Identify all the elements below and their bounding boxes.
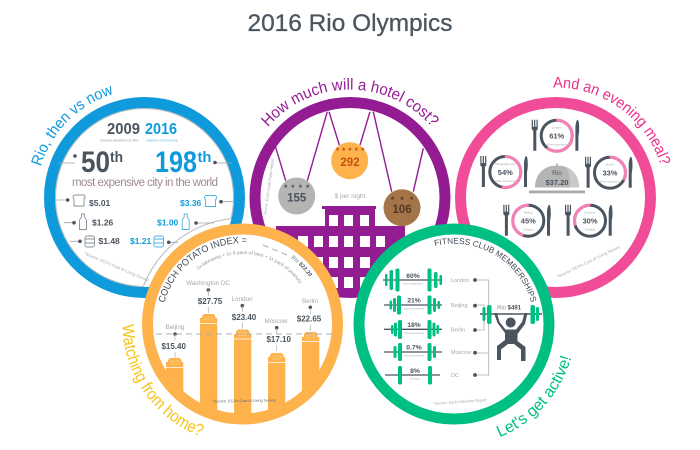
icons: grey bread, milk, beer bbox=[73, 195, 94, 247]
right prices: $3.36 bbox=[180, 198, 202, 208]
formula: 2x takeaway + 1x 6 pack of beer + 1x pack of peanuts bbox=[196, 250, 302, 284]
Washington DC: $27.75 bbox=[198, 297, 223, 306]
plate: Beijing 45% bbox=[503, 205, 551, 236]
Moscow: Moscow bbox=[264, 318, 288, 325]
plate: Washington DC 54% bbox=[480, 156, 528, 188]
barbell: Beijing 21%: 21% bbox=[407, 298, 421, 304]
lifter barbell bbox=[480, 305, 542, 324]
barbell: DC 8% bbox=[385, 366, 440, 384]
panel: hotel cost bbox=[250, 78, 450, 298]
right prices: $1.21 bbox=[130, 236, 152, 246]
icon: weightlifter bbox=[494, 313, 528, 361]
barbell: Beijing 21%: More expensive bbox=[404, 306, 424, 310]
barbell: Berlin 18%: 18% bbox=[407, 322, 421, 329]
source note: *Source: ECA's Cost of Living Survey bbox=[212, 398, 276, 404]
Washington DC bbox=[186, 280, 230, 313]
Moscow bbox=[264, 318, 291, 351]
years bbox=[107, 121, 177, 138]
plate: Berlin 33%: 33% bbox=[602, 169, 618, 178]
years: 2016 bbox=[145, 121, 177, 138]
Moscow: $17.10 bbox=[266, 335, 291, 344]
Beijing: Beijing bbox=[166, 324, 185, 331]
barbell: London 60%: 60% bbox=[406, 273, 420, 280]
white disc bbox=[142, 224, 342, 424]
ring: pink bbox=[460, 102, 650, 292]
plate: Beijing 45%: Cheaper bbox=[523, 228, 534, 232]
rank 2016: th bbox=[198, 149, 212, 166]
index dash line bbox=[156, 245, 332, 334]
rank 2009: th bbox=[110, 149, 123, 166]
plate: Berlin 33% bbox=[585, 157, 632, 188]
heading: fitness club memberships: FITNESS CLUB MEMBERSHIPS bbox=[434, 238, 536, 302]
heading: Rio, then vs now: Rio, then vs now bbox=[31, 86, 112, 166]
Washington DC: Washington DC bbox=[186, 280, 230, 287]
barbell: Berlin 18% bbox=[384, 320, 442, 339]
heading: evening meal: And an evening meal? bbox=[553, 76, 670, 163]
Berlin: $22.65 bbox=[297, 315, 322, 324]
rank caption: most expensive city in the world bbox=[72, 177, 218, 189]
rank 2009: 50 bbox=[81, 146, 110, 179]
hotel building bbox=[276, 206, 405, 288]
plate: Beijing 45%: 45% bbox=[521, 217, 536, 226]
year captions: Games commence bbox=[146, 138, 178, 142]
cloche: Rio $37.20: $37.20 bbox=[546, 178, 568, 187]
panel: evening meal bbox=[455, 76, 670, 298]
ring: green bbox=[359, 229, 549, 419]
plate: Beijing 45%: Beijing bbox=[524, 211, 533, 215]
plate: Moscow 30% bbox=[565, 205, 612, 236]
plate: London 61%: More expensive bbox=[547, 143, 567, 147]
years: 2009 bbox=[107, 121, 140, 138]
left prices bbox=[89, 198, 120, 246]
city labels: London bbox=[451, 278, 469, 284]
medal: silver 155 bbox=[278, 178, 315, 214]
plate: Berlin 33%: More expensive bbox=[600, 180, 620, 184]
London bbox=[231, 296, 257, 329]
medal: silver 155: ★ ★ ★ ★ bbox=[283, 183, 310, 190]
barbell: Moscow 0.7% bbox=[384, 343, 442, 361]
plate: Moscow 30%: Cheaper bbox=[585, 228, 595, 232]
source note: Source: ECA's Daily Rates Report bbox=[263, 157, 275, 216]
right prices: $1.00 bbox=[157, 218, 179, 228]
plate: Washington DC 54%: More expensive bbox=[495, 179, 516, 183]
panel: couch potato index bbox=[122, 224, 343, 436]
ring: blue bbox=[50, 102, 240, 292]
left prices: $1.48 bbox=[98, 236, 120, 246]
city labels: DC bbox=[451, 373, 459, 379]
year captions bbox=[100, 138, 178, 142]
caption: $ per night: $ per night bbox=[335, 193, 366, 200]
plate: London 61%: London bbox=[552, 126, 562, 130]
barbell: London 60%: More expensive bbox=[403, 282, 423, 286]
left prices: $1.26 bbox=[92, 218, 114, 228]
ring: orange bbox=[148, 229, 338, 419]
plate: Washington DC 54%: Washington DC bbox=[495, 162, 517, 166]
source note: *Source: ECA's Cost of Living Survey bbox=[84, 251, 150, 283]
medal: silver 155: 155 bbox=[287, 192, 307, 204]
year captions: Games awarded to Rio bbox=[100, 138, 138, 142]
label: Rio $491: Rio $491 bbox=[497, 306, 522, 312]
medal: bronze 106: ★ ★ ★ bbox=[390, 195, 414, 202]
medal: gold 292: 292 bbox=[340, 157, 360, 169]
barbell: Moscow 0.7%: More expensive bbox=[404, 354, 424, 358]
cloche: Rio $37.20 bbox=[529, 164, 585, 193]
medal: gold 292: ★★★★★ bbox=[335, 146, 365, 153]
heading: watching from home: Watching from home? bbox=[122, 324, 204, 436]
chart labels bbox=[161, 280, 322, 358]
plate: Moscow 30%: 30% bbox=[582, 217, 598, 226]
plate: Washington DC 54%: 54% bbox=[498, 168, 513, 177]
panel: Rio then vs now bbox=[31, 86, 245, 298]
left prices: $5.01 bbox=[89, 198, 111, 208]
inner outline bbox=[55, 108, 234, 287]
ring: purple bbox=[255, 102, 445, 292]
London: $23.40 bbox=[232, 313, 257, 322]
Beijing: $15.40 bbox=[161, 342, 186, 351]
connector dots bbox=[55, 154, 233, 244]
city labels: Beijing bbox=[451, 303, 468, 309]
rank 2016: 198 bbox=[155, 146, 197, 179]
connectors bbox=[473, 278, 489, 377]
barbell: DC 8%: 8% bbox=[410, 368, 420, 375]
barbell: London 60% bbox=[383, 268, 442, 292]
plate: London 61%: 61% bbox=[549, 132, 565, 141]
medal: bronze 106 bbox=[384, 189, 420, 226]
heading: hotel: How much will a hotel cost? bbox=[260, 78, 439, 126]
barbell: Beijing 21% bbox=[384, 296, 442, 314]
medal: bronze 106: 106 bbox=[392, 204, 412, 216]
cloche: Rio $37.20: Rio bbox=[552, 170, 562, 177]
right prices bbox=[130, 198, 202, 246]
Rio value: Rio $22.20 bbox=[291, 255, 312, 276]
plate: Berlin 33%: Berlin bbox=[606, 163, 614, 167]
plate: Moscow 30%: Moscow bbox=[584, 211, 596, 215]
medal: gold 292 bbox=[331, 142, 368, 179]
Beijing bbox=[161, 324, 186, 358]
city labels bbox=[451, 278, 471, 379]
barbell: DC 8%: Cheaper bbox=[410, 376, 420, 380]
barbell: Berlin 18%: More expensive bbox=[404, 331, 424, 335]
city labels: Moscow bbox=[451, 350, 471, 356]
source note: *Source: ECA's Cost of Living Survey bbox=[556, 244, 621, 279]
title: 2016 Rio Olympics bbox=[248, 10, 452, 37]
plate: London 61% bbox=[532, 120, 579, 151]
heading: couch potato index: COUCH POTATO INDEX = bbox=[158, 236, 246, 302]
heading: get active: Let's get active! bbox=[496, 356, 571, 437]
pint bars bbox=[166, 314, 320, 414]
barbell: Moscow 0.7%: 0.7% bbox=[406, 344, 422, 352]
source note: *Source: ECA's Benefits Report bbox=[433, 398, 488, 406]
Berlin bbox=[297, 298, 322, 331]
icons: blue bread, milk, beer bbox=[154, 196, 216, 247]
Berlin: Berlin bbox=[302, 298, 319, 305]
medal strings bbox=[276, 112, 423, 192]
city labels: Berlin bbox=[451, 328, 465, 334]
London: London bbox=[231, 296, 253, 303]
panel: fitness club bbox=[354, 224, 571, 437]
